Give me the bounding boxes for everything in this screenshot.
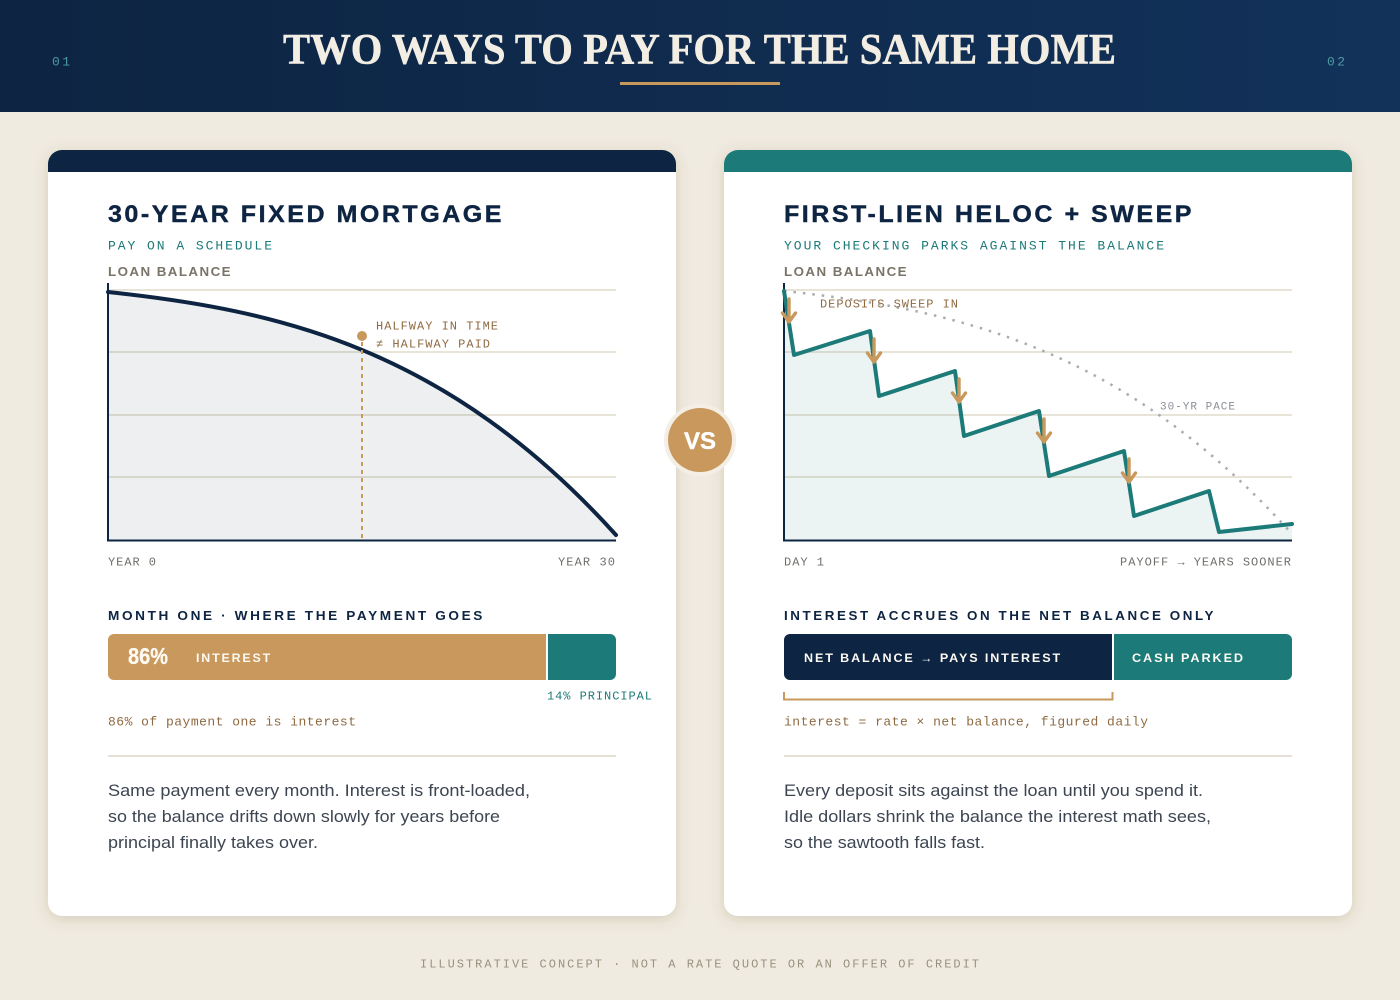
deposit arrows [782, 299, 1136, 482]
halfway marker [357, 331, 367, 540]
area under sawtooth [784, 291, 1292, 540]
chart: amortization curve [108, 283, 616, 570]
deposits annotation: DEPOSITS SWEEP IN [820, 298, 958, 312]
VS badge [664, 404, 736, 476]
cash parked label: CASH PARKED [1132, 651, 1245, 665]
VS badge: VS [684, 428, 716, 455]
chart label: LOAN BALANCE [108, 264, 232, 279]
interest percent: 86% [128, 643, 168, 669]
column number left: 01 [52, 54, 70, 70]
axis label end: YEAR 30 [558, 556, 615, 570]
payment split heading: MONTH ONE · WHERE THE PAYMENT GOES [108, 608, 485, 623]
panel: 30-year fixed mortgage [48, 150, 676, 916]
panel top bar navy [48, 150, 676, 172]
axes [784, 283, 1292, 540]
halfway annotation: ≠ HALFWAY PAID [376, 338, 490, 352]
bracket under net balance [784, 692, 1112, 700]
principal label: 14% PRINCIPAL [547, 690, 652, 704]
halfway annotation [376, 320, 498, 352]
panel subtitle: YOUR CHECKING PARKS AGAINST THE BALANCE [784, 238, 1164, 254]
cash parked segment [1114, 634, 1292, 680]
panel body text: Idle dollars shrink the balance the interest math sees, [784, 807, 1211, 826]
panel body text: so the sawtooth falls fast. [784, 833, 985, 852]
panel: first-lien HELOC + sweep [724, 150, 1352, 916]
header band [0, 0, 1400, 112]
panel body text: Every deposit sits against the loan until you spend it. [784, 781, 1203, 800]
stacked bar: payment split [108, 634, 616, 680]
panel body text [108, 781, 530, 852]
axis label start: DAY 1 [784, 556, 824, 570]
panel top bar teal [724, 150, 1352, 172]
axis label end: PAYOFF → YEARS SOONER [1120, 556, 1291, 570]
title underline [620, 82, 780, 85]
30-year pace dotted curve [784, 291, 1292, 534]
net balance segment [784, 634, 1112, 680]
footer disclaimer: ILLUSTRATIVE CONCEPT · NOT A RATE QUOTE OR AN OFFER OF CREDIT [420, 958, 979, 972]
net balance label: NET BALANCE → PAYS INTEREST [804, 651, 1062, 665]
interest label: INTEREST [196, 651, 272, 665]
balance curve [108, 292, 616, 535]
panel subtitle: PAY ON A SCHEDULE [108, 238, 272, 254]
panel body text [784, 781, 1211, 852]
panel body text: principal finally takes over. [108, 833, 318, 852]
chart label: LOAN BALANCE [784, 264, 908, 279]
sawtooth line [784, 291, 1292, 532]
axis label start: YEAR 0 [108, 556, 156, 570]
bar caption: 86% of payment one is interest [108, 714, 356, 730]
panel heading: 30-YEAR FIXED MORTGAGE [108, 201, 504, 228]
interest segment [108, 634, 546, 680]
panel heading: FIRST-LIEN HELOC + SWEEP [784, 201, 1194, 228]
halfway annotation: HALFWAY IN TIME [376, 320, 498, 334]
axes [108, 283, 616, 540]
net balance heading: INTEREST ACCRUES ON THE NET BALANCE ONLY [784, 608, 1216, 623]
column number right: 02 [1327, 54, 1345, 70]
chart: sawtooth balance [782, 283, 1292, 570]
area under curve [108, 292, 616, 540]
principal segment [548, 634, 616, 680]
pace annotation: 30-YR PACE [1160, 402, 1235, 414]
panel body text: Same payment every month. Interest is front-loaded, [108, 781, 530, 800]
panel body text: so the balance drifts down slowly for years before [108, 807, 500, 826]
title: TWO WAYS TO PAY FOR THE SAME HOME [283, 26, 1116, 74]
formula caption: interest = rate × net balance, figured daily [784, 714, 1148, 730]
stacked bar: net balance vs cash [784, 634, 1292, 680]
